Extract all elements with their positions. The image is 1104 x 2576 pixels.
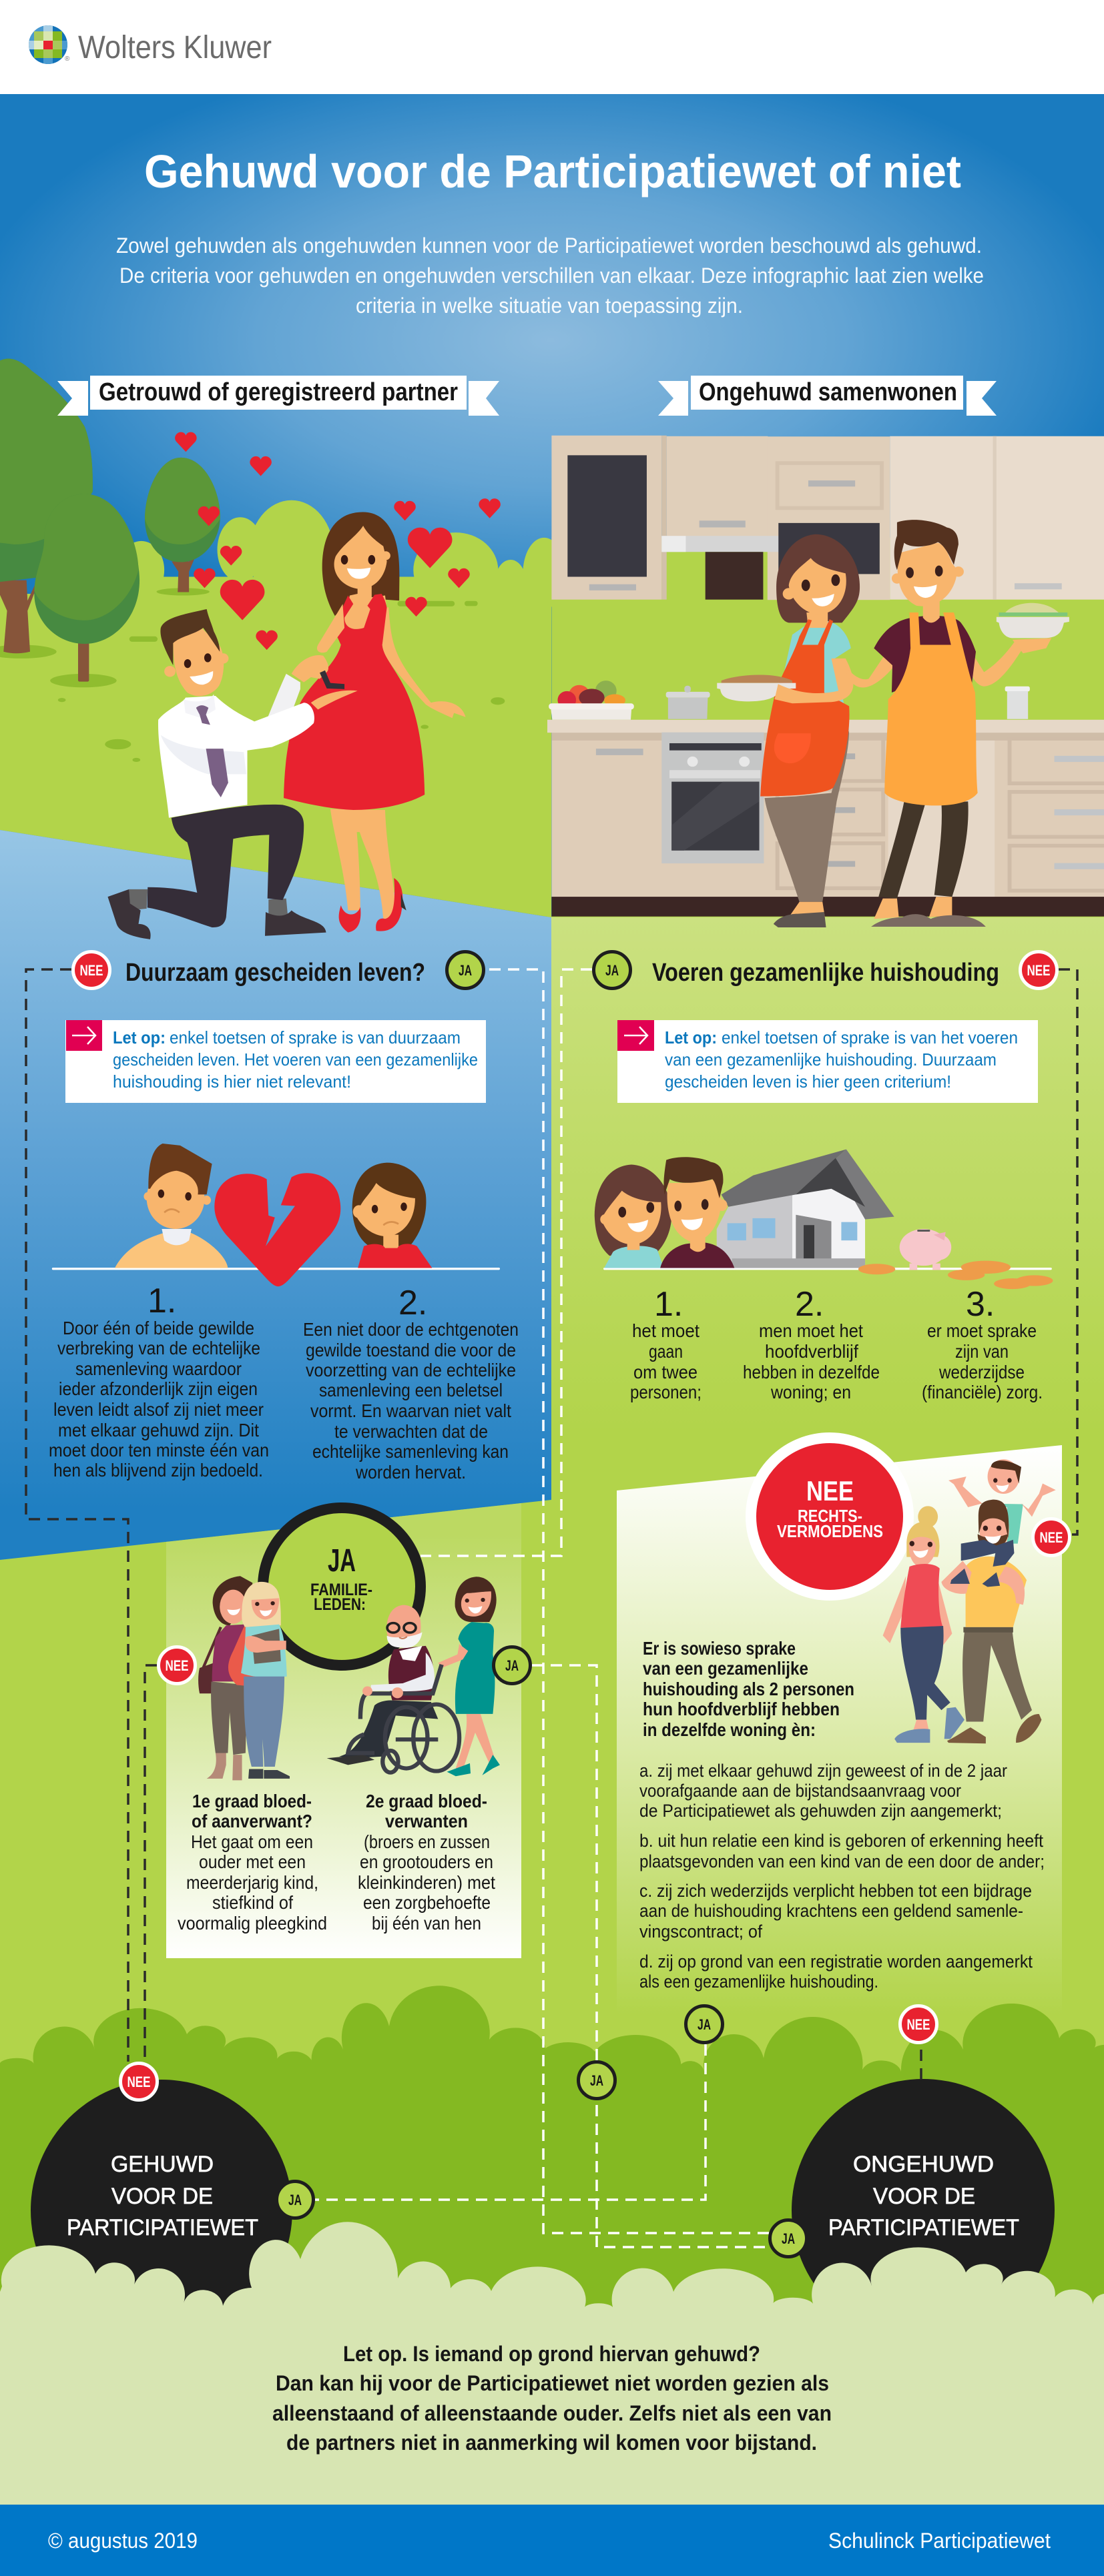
text: gescheiden criterium 2: vormt. En waarvan niet valt [310,1400,511,1421]
badges: nee: NEE [80,962,103,979]
callout: let op right [617,1020,1038,1103]
circle: ongehuwd voor de participatiewet [792,2079,1055,2342]
text: gescheiden criterium 1: leven leidt alsof zij niet meer [53,1399,264,1420]
woman in red dress [284,512,466,933]
circle: ja familieleden [263,1508,421,1665]
text: list a-d: b. uit hun relatie een kind is geboren of erkenning heeft [639,1831,1043,1851]
callout: let op right: van een gezamenlijke huishouding. Duurzaam [665,1049,997,1069]
text: gescheiden criterium 2: te verwachten dat de [334,1421,488,1442]
badges: ja: JA [590,2072,603,2089]
text: gescheiden criterium 2: echtelijke samenleving kan [312,1441,509,1462]
badges: ja: JA [698,2016,711,2033]
black circle label left: VOOR DE [111,2184,213,2209]
footer [0,2505,1104,2576]
illustration: two women and man in wheelchair with carer [198,1576,500,1780]
callout: let op left: huishouding is hier niet relevant! [113,1071,351,1092]
closing note: Let op. Is iemand op grond hiervan gehuwd? [343,2342,760,2366]
badges: ja [276,951,806,2256]
text: list a-d: a. zij met elkaar gehuwd zijn geweest of in de 2 jaar [639,1761,1007,1781]
text: 2e graad: verwanten [385,1811,468,1831]
illustration: family with child on shoulders [883,1459,1056,1743]
lower cabinets [547,720,1104,917]
text: gescheiden criterium 1: Door één of beide gewilde [63,1318,254,1338]
badges: ja: JA [782,2230,795,2247]
text: list a-d: aan de huishouding krachtens een geldend samenle- [639,1901,1023,1921]
text: list a-d: voorafgaande aan de bijstandsaanvraag voor [639,1781,961,1801]
heading: Duurzaam gescheiden leven?: Duurzaam gescheiden leven? [125,959,425,987]
text: 2e graad: kleinkinderen) met [358,1872,495,1893]
text: huishouding criterium 3: zijn van [955,1341,1009,1362]
text: huishouding criterium 2: hebben in dezelfde [743,1362,880,1382]
text: list a-d: als een gezamenlijke huishouding. [639,1972,878,1992]
upper cabinets [551,436,1104,600]
text: 2e graad: een zorgbehoefte [363,1892,491,1913]
circle: nee rechtsvermoedens: RECHTS- [798,1506,862,1526]
text: gescheiden criterium 1: samenleving waardoor [75,1358,242,1379]
text: huishouding criterium 3: (financiële) zorg. [922,1382,1043,1402]
text: 2e graad [358,1791,495,1934]
callout: let op left: gescheiden leven. Het voeren van een gezamenlijke [113,1049,478,1069]
ribbon: Ongehuwd samenwonen [658,376,997,416]
ribbon: Getrouwd of geregistreerd partner: Getrouwd of geregistreerd partner [99,378,458,406]
logo: Wolters Kluwer: Wolters Kluwer [78,30,272,65]
text: 2e graad: 2e graad bloed- [366,1791,487,1811]
text: 2e graad: (broers en zussen [364,1831,490,1852]
circle: nee rechtsvermoedens: VERMOEDENS [777,1521,883,1541]
text: gescheiden criterium 1: ieder afzonderlijk zijn eigen [59,1378,258,1399]
text: huishouding criterium 2: men moet het [759,1320,863,1341]
panel: rechtsvermoedens background [617,1445,1062,2015]
circle: ja familieleden: LEDEN: [314,1595,366,1614]
black circle label right: PARTICIPATIEWET [828,2215,1019,2240]
text: huishouding criterium 3: er moet sprake [927,1320,1037,1341]
tree front [34,494,140,687]
text: 1e graad: Het gaat om een [191,1831,313,1852]
text: list a-d: plaatsgevonden van een kind van de een door de ander; [639,1851,1045,1871]
text: 1e graad: of aanverwant? [192,1811,312,1831]
logo: Wolters Kluwer: ® [65,55,70,63]
badges: ja: JA [605,962,619,979]
text: gescheiden criterium 2: 2. [398,1284,427,1322]
closing note [272,2342,832,2455]
footer: © augustus 2019 [48,2529,198,2553]
bushes front [0,2222,1104,2509]
heading: Voeren gezamenlijke huishouding: Voeren gezamenlijke huishouding [652,959,999,987]
text: gescheiden criterium 2: Een niet door de echtgenoten [303,1319,519,1340]
text: list a-d [639,1761,1045,1992]
text: 1e graad [178,1791,327,1934]
circle: ja familieleden: JA [328,1543,356,1579]
text: gescheiden criterium 2: voorzetting van de echtelijke [306,1360,516,1380]
text: gescheiden criterium 1: verbreking van de echtelijke [57,1338,260,1358]
man kneeling with ring [107,609,358,939]
badges: nee: NEE [1027,962,1051,979]
text: huishouding criterium 2 [743,1285,880,1402]
badges: nee: NEE [127,2074,151,2090]
black circle label right: VOOR DE [873,2184,975,2209]
text: 1e graad: ouder met een [199,1851,306,1872]
bowl of fruit, pot, cup [549,681,1030,720]
text: huishouding criterium 1: personen; [630,1382,702,1402]
text: 2e graad: bij één van hen [372,1913,481,1934]
text: huishouding criterium 1: het moet [632,1320,700,1341]
panel: blue gescheiden background [0,830,551,1560]
text: list a-d: de Participatiewet als gehuwden zijn aangemerkt; [639,1801,1002,1821]
badges: ja: JA [505,1657,519,1674]
hearts [175,432,501,650]
callout: let op left: enkel toetsen of sprake is van duurzaam [170,1027,461,1047]
text: bold intro rechtsvermoedens: in dezelfde woning èn: [643,1719,816,1740]
closing note: Dan kan hij voor de Participatiewet niet worden gezien als [276,2371,829,2395]
circle: ja familieleden: FAMILIE- [310,1581,372,1599]
black circle label left [67,2152,258,2240]
badges: nee: NEE [166,1657,188,1674]
text: gescheiden criterium 1: 1. [148,1282,176,1320]
text: bold intro rechtsvermoedens: huishouding als 2 personen [643,1679,854,1699]
badges: nee: NEE [906,2016,930,2033]
illustration: kitchen with couple [547,436,1104,927]
intro text: Zowel gehuwden als ongehuwden kunnen voor de Participatiewet worden beschouwd als gehuwd. [116,234,982,258]
left ground [0,594,551,917]
title: Gehuwd voor de Participatiewet of niet [144,145,961,197]
badges: nee: NEE [1040,1529,1063,1546]
tree middle [145,458,220,596]
text: list a-d: d. zij op grond van een registratie worden aangemerkt [639,1952,1033,1972]
text: huishouding criterium 2: hoofdverblijf [765,1341,858,1362]
closing note: alleenstaand of alleenstaande ouder. Zelfs niet als een van [272,2401,832,2425]
intro text: De criteria voor gehuwden en ongehuwden verschillen van elkaar. Deze infographic laat zien welke [119,264,984,288]
black circle label right: ONGEHUWD [853,2152,994,2177]
text: list a-d: c. zij zich wederzijds verplicht hebben tot een bijdrage [639,1881,1032,1901]
black circle label right [828,2152,1019,2240]
text: 1e graad: stiefkind of [212,1892,293,1913]
circle: nee rechtsvermoedens [751,1438,908,1595]
circle: nee rechtsvermoedens: NEE [806,1475,854,1507]
text: 1e graad: meerderjarig kind, [186,1872,318,1893]
text: 1e graad: 1e graad bloed- [192,1791,312,1811]
circle: gehuwd voor de participatiewet [31,2080,292,2341]
callout: let op left [65,1020,486,1103]
text: bold intro rechtsvermoedens: hun hoofdverblijf hebben [643,1699,840,1719]
text: huishouding criterium 2: woning; en [770,1382,851,1402]
callout: let op right: enkel toetsen of sprake is van het voeren [722,1027,1018,1047]
badges: nee [73,951,1069,2100]
text: gescheiden criterium 2: gewilde toestand die voor de [306,1340,516,1360]
text: huishouding criterium 2: 2. [795,1285,824,1324]
intro text [116,234,984,318]
illustration: couple with house, piggy bank and coins [595,1150,1053,1289]
text: huishouding criterium 1: 1. [654,1285,683,1324]
bushes back [0,1986,1104,2348]
closing note: de partners niet in aanmerking wil komen voor bijstand. [286,2431,817,2455]
black circle label left: GEHUWD [111,2152,214,2177]
text: 2e graad: en grootouders en [360,1851,493,1872]
text: gescheiden criterium 2: worden hervat. [355,1462,466,1482]
logo: Wolters Kluwer [27,24,272,65]
illustration: proposal couple in the park [0,359,565,939]
man with yellow apron [840,520,1069,927]
text: gescheiden criterium 1: met elkaar gehuwd zijn. Dit [58,1420,259,1440]
intro text: criteria in welke situatie van toepassing zijn. [356,294,743,318]
text: gescheiden criterium 1: hen als blijvend zijn bedoeld. [53,1460,263,1480]
callout: let op left: Let op: [113,1027,166,1047]
woman with red apron [717,534,860,927]
text: list a-d: vingscontract; of [639,1921,762,1942]
text: huishouding criterium 3: 3. [966,1285,995,1324]
panel: familieleden background [166,1503,521,1958]
text: bold intro rechtsvermoedens: Er is sowieso sprake [643,1638,796,1659]
callout: let op right: gescheiden leven is hier geen criterium! [665,1071,951,1092]
text: huishouding criterium 1: om twee [633,1362,698,1382]
text: gescheiden criterium 1: moet door ten minste één van [49,1440,269,1460]
tree left [0,359,93,659]
text: huishouding criterium 1 [630,1285,702,1402]
ribbon: Ongehuwd samenwonen: Ongehuwd samenwonen [699,378,957,406]
footer: Schulinck Participatiewet [828,2529,1051,2553]
text: bold intro rechtsvermoedens [643,1638,854,1740]
badges: ja: JA [459,962,472,979]
dashed connector lines [26,969,1077,2247]
text: gescheiden criterium 2: samenleving een beletsel [319,1380,503,1400]
text: 1e graad: voormalig pleegkind [178,1913,327,1934]
text: bold intro rechtsvermoedens: van een gezamenlijke [643,1658,808,1679]
badges: ja: JA [288,2192,302,2208]
text: huishouding criterium 1: gaan [649,1341,683,1362]
text: gescheiden criterium 1 [49,1282,269,1480]
text: huishouding criterium 3: wederzijdse [938,1362,1025,1382]
callout: let op right: Let op: [665,1027,717,1047]
text: gescheiden criterium 2 [303,1284,519,1482]
illustration: broken heart couple [52,1144,500,1286]
text: huishouding criterium 3 [922,1285,1043,1402]
black circle label left: PARTICIPATIEWET [67,2215,258,2240]
ribbon: Getrouwd of geregistreerd partner [57,376,499,416]
